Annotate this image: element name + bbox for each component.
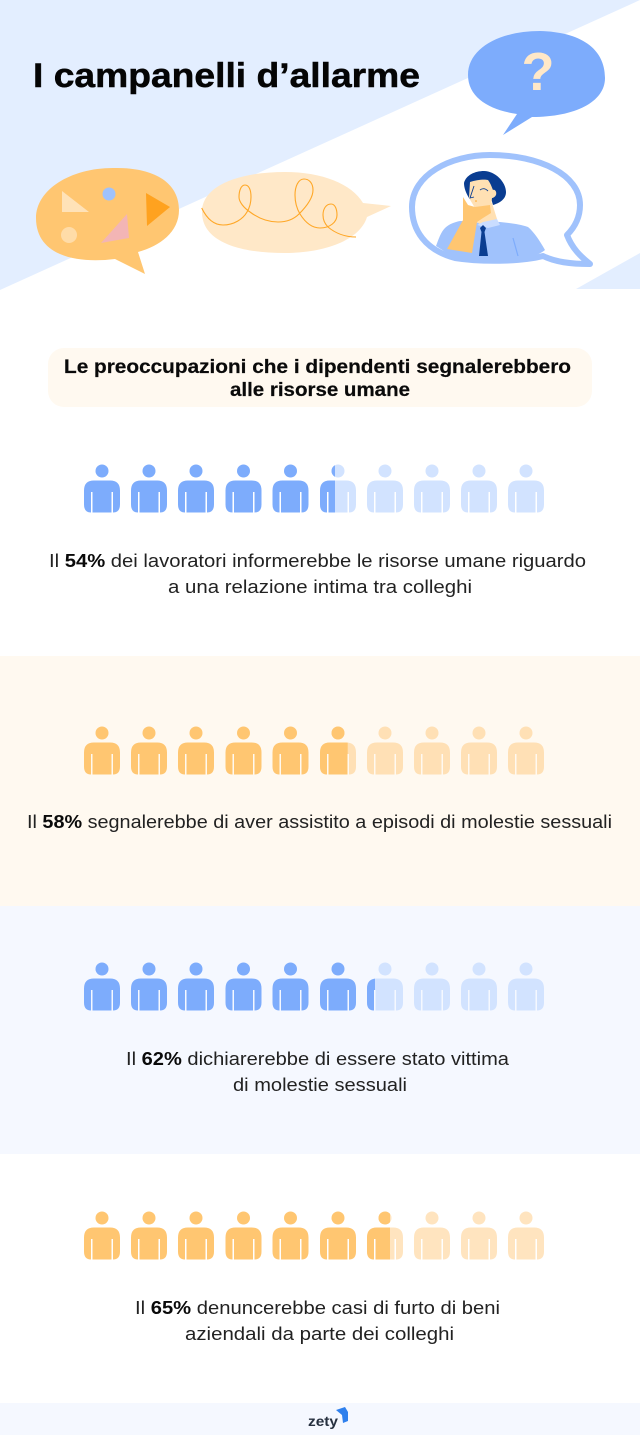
- text: 58%: Il 58% segnalerebbe di aver assistito a episodi di molestie sessuali: [27, 812, 612, 832]
- bubble outline: [412, 155, 590, 264]
- shirt: [436, 221, 545, 262]
- panel: section heading: [48, 348, 592, 407]
- icon: orange speech bubble with shapes: [36, 168, 179, 274]
- face: [469, 180, 496, 208]
- tie: [479, 225, 488, 256]
- text: 65%: Il 65% denuncerebbe casi di furto di beni: [135, 1298, 500, 1318]
- hair: [464, 171, 506, 205]
- title: I campanelli d’allarme: [33, 57, 420, 95]
- panel: section heading: alle risorse umane: [230, 380, 410, 401]
- pictogram: 65%: [84, 1212, 544, 1260]
- icon: peach speech bubble with squiggle: [202, 172, 391, 253]
- header background triangle: [0, 0, 640, 290]
- panel: band orange: [0, 656, 640, 906]
- text: 62%: di molestie sessuali: [233, 1075, 407, 1095]
- icon: blue question speech bubble: [468, 31, 605, 135]
- icon: thinking man in outlined speech bubble: [412, 155, 590, 264]
- text: 65%: aziendali da parte dei colleghi: [185, 1324, 454, 1344]
- icon: blue question speech bubble: ?: [522, 42, 554, 102]
- collar: [477, 219, 500, 228]
- heading text: Le preoccupazioni che i dipendenti segnalerebbero: [64, 357, 571, 378]
- text: 62%: [126, 1049, 510, 1095]
- neck: [476, 203, 497, 226]
- text: 65%: [135, 1298, 500, 1344]
- pictogram: 58%: [84, 726, 544, 774]
- text: 54%: Il 54% dei lavoratori informerebbe le risorse umane riguardo: [49, 551, 586, 571]
- logo: zety: zety: [308, 1413, 338, 1429]
- panel: footer band: [0, 1403, 640, 1435]
- header corner triangle: [576, 253, 640, 289]
- pictogram: 62%: [84, 962, 544, 1010]
- text: 62%: Il 62% dichiarerebbe di essere stato vittima: [126, 1049, 510, 1069]
- text: 54%: a una relazione intima tra colleghi: [168, 577, 472, 597]
- panel: band blue: [0, 906, 640, 1154]
- text: 54%: [49, 551, 586, 597]
- pictogram: 54%: [84, 464, 544, 512]
- logo: zety: [308, 1407, 348, 1429]
- arm and hand: [447, 197, 491, 253]
